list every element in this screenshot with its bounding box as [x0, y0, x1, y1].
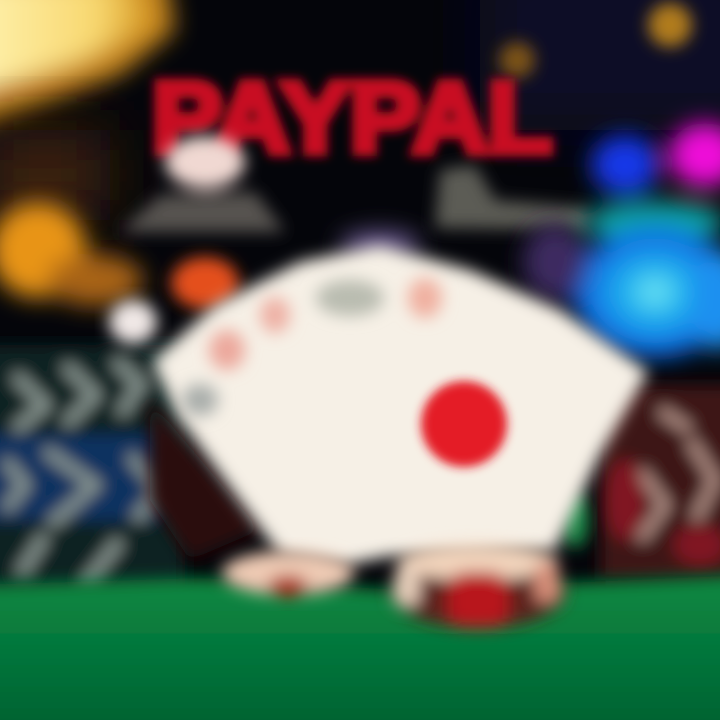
title: PAYPAL: PAYPAL [152, 62, 552, 174]
red circle pip [421, 381, 507, 467]
card pips top [182, 278, 442, 416]
playing cards fan [152, 245, 648, 565]
chip front right [390, 544, 566, 628]
gold glow top left [0, 0, 175, 130]
orange chip behind cards [171, 257, 239, 309]
green sliver between cards and right chips [561, 492, 589, 548]
small gold lights top right [499, 3, 692, 78]
left brown haze [0, 130, 110, 220]
chip stack left [0, 345, 185, 595]
neon lights right [340, 123, 720, 358]
chip stack right [600, 385, 720, 580]
dark red chips under cards [150, 400, 260, 560]
white chip highlight left [109, 300, 157, 344]
chip front left [222, 551, 354, 597]
card shape [152, 245, 648, 565]
green table felt [0, 575, 720, 720]
grey table shapes under title [120, 136, 590, 232]
orange lights left [0, 202, 143, 306]
